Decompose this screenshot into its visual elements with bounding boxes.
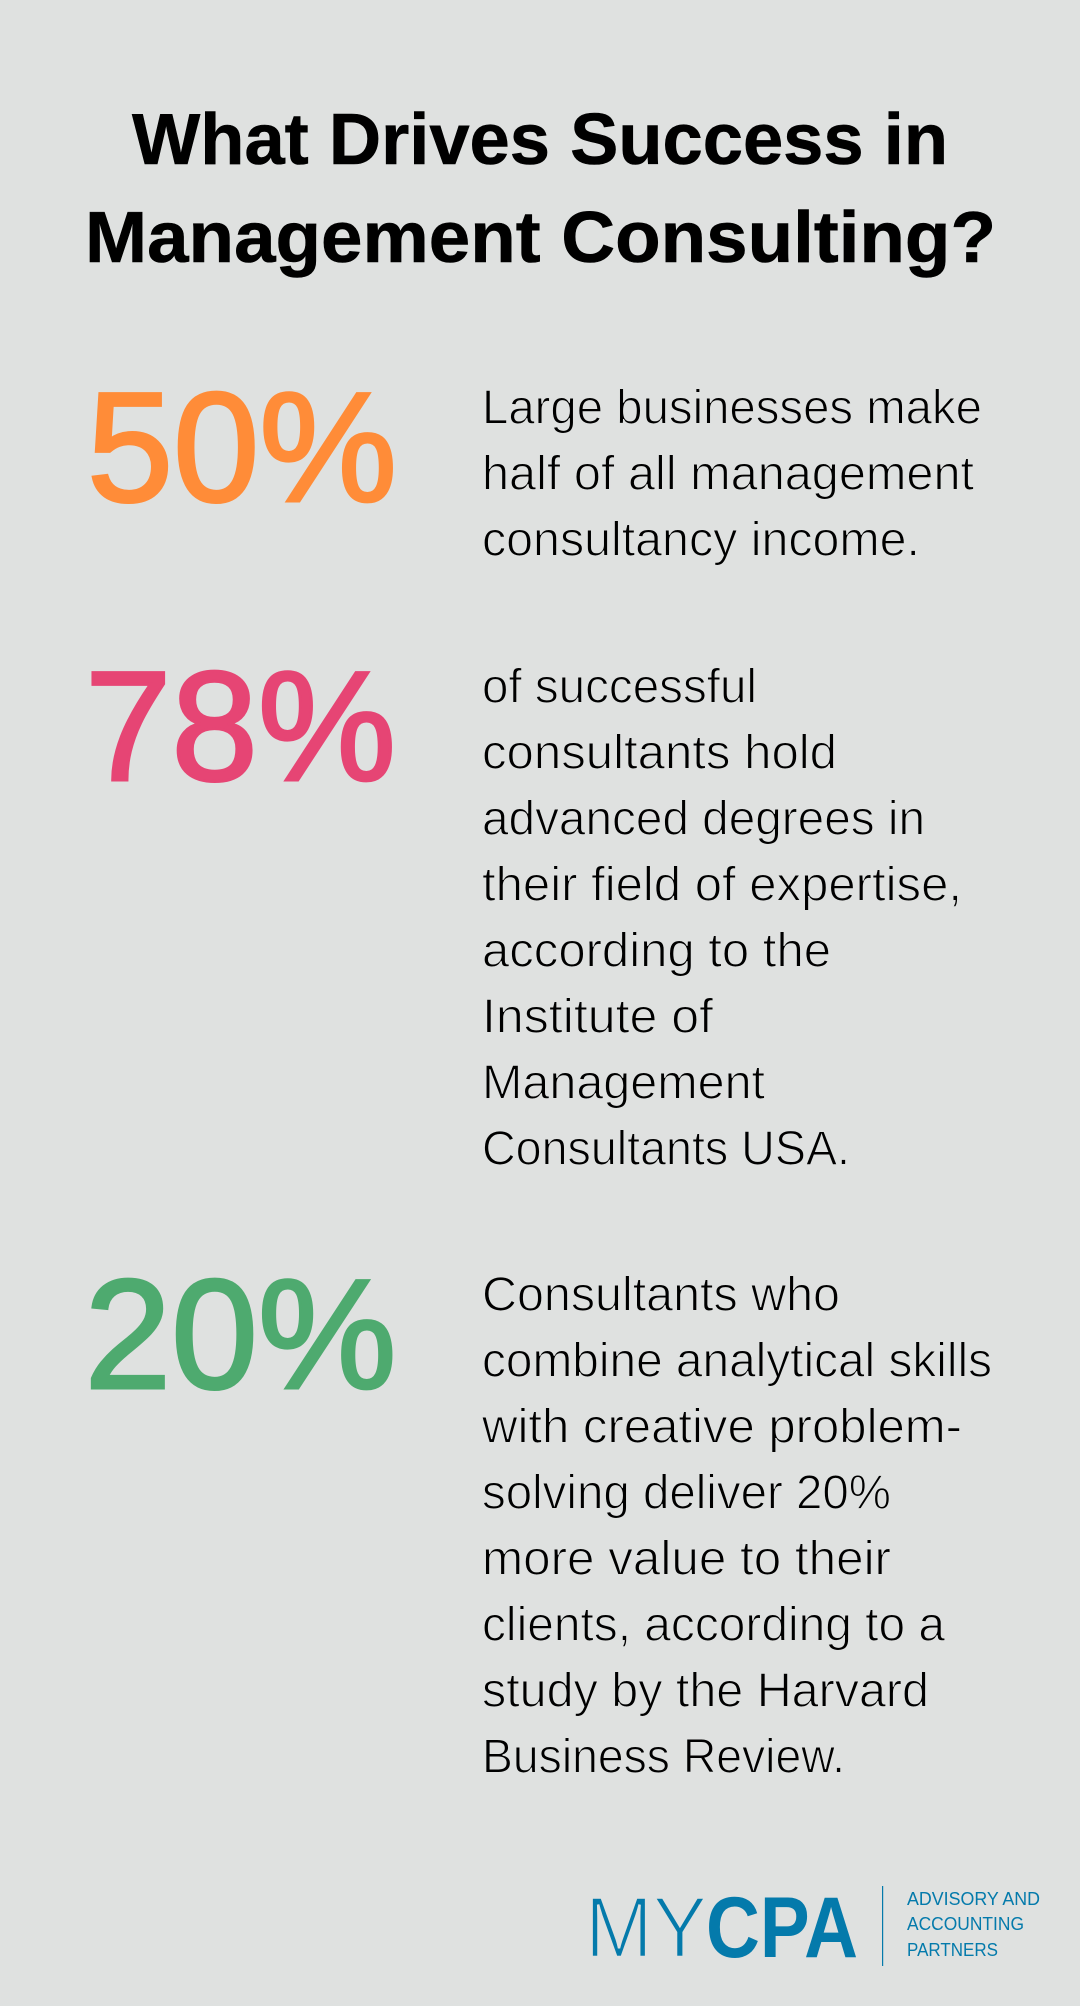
wordmark: MY [585, 1880, 707, 1976]
text: advanced degrees: advanced degrees in [482, 792, 925, 846]
tagline: PARTNERS [907, 1940, 998, 1960]
text: large businesses: consultancy income. [482, 514, 920, 566]
logo: MYCPA [585, 1880, 1040, 1976]
number: 78%: 78% [85, 640, 396, 814]
text: advanced degrees: consultants hold [482, 726, 837, 780]
text: analytical and creative: combine analytical skills [482, 1334, 992, 1388]
panel: stat 78% [85, 640, 962, 1176]
text: advanced degrees [482, 660, 962, 1176]
text: advanced degrees: of successful [482, 660, 757, 714]
title: What Drives Success in [132, 100, 948, 180]
number: 20%: 20% [84, 1248, 396, 1422]
text: advanced degrees: Institute of [482, 990, 714, 1044]
text: advanced degrees: according to the [482, 924, 831, 978]
panel: stat 50% [87, 361, 982, 566]
number: 50%: 50% [87, 361, 397, 535]
text: large businesses: Large businesses make [482, 382, 982, 434]
wordmark: CPA [706, 1880, 858, 1976]
text: large businesses: half of all management [482, 448, 974, 500]
text: analytical and creative: with creative problem- [481, 1400, 962, 1454]
title: Management Consulting? [85, 198, 996, 278]
text: analytical and creative: Business Review. [482, 1730, 845, 1784]
text: analytical and creative: study by the Harvard [482, 1664, 929, 1718]
tagline [907, 1889, 1040, 1960]
text: advanced degrees: their field of expertise, [482, 858, 962, 912]
tagline: ACCOUNTING [907, 1914, 1024, 1934]
text: large businesses [482, 382, 982, 566]
text: analytical and creative: more value to their [482, 1532, 891, 1586]
text: advanced degrees: Consultants USA. [482, 1122, 850, 1176]
text: analytical and creative [481, 1268, 992, 1784]
text: analytical and creative: clients, according to a [482, 1598, 945, 1652]
text: analytical and creative: Consultants who [482, 1268, 840, 1322]
text: analytical and creative: solving deliver 20% [482, 1466, 891, 1520]
panel: stat 20% [84, 1248, 992, 1784]
title [85, 100, 996, 278]
wordmark [585, 1880, 858, 1976]
tagline: ADVISORY AND [907, 1889, 1040, 1909]
text: advanced degrees: Management [482, 1056, 765, 1110]
